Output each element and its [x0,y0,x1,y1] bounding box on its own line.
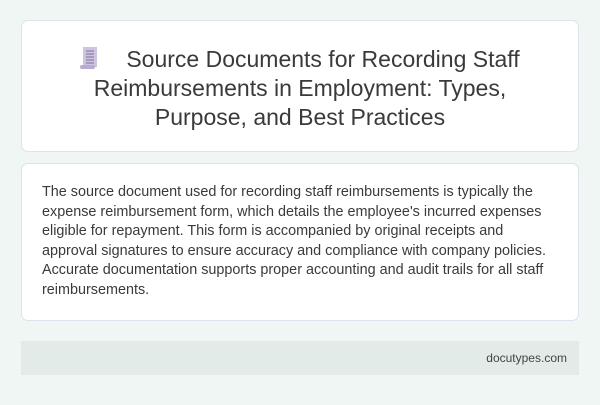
icon: receipt [80,47,97,69]
title: Source Documents for Recording Staff Reimbursements in Employment: Types, Purpose, and Best Practices [94,46,520,130]
panel: description [21,163,579,321]
text block: The source document used for recording staff reimbursements is typically the expense reimbursement form, which details the employee's incurred expenses eligible for repayment. This form is accompanied by original receipts and approval signatures to ensure accuracy and compliance with company policies. Accurate documentation supports proper accounting and audit trails for all staff reimbursements. [42,184,546,298]
footer [21,341,579,375]
footer text: docutypes.com [486,351,567,365]
panel: title card [21,20,579,152]
